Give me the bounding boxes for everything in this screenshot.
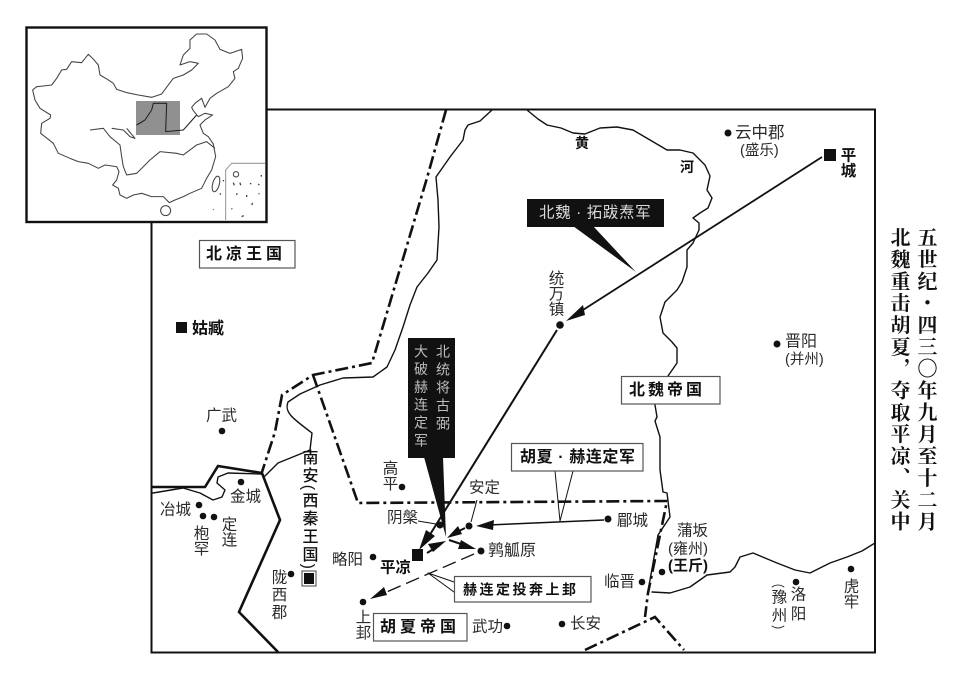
callout: 胡夏·赫连定军: 胡夏 · 赫连定军 bbox=[520, 447, 636, 466]
place: 晋阳 bbox=[774, 332, 824, 368]
place: 冶城 bbox=[160, 500, 202, 518]
place: 平凉 bbox=[380, 549, 423, 576]
title: two vertical columns on the right bbox=[887, 227, 937, 533]
arrow: dashed retreat to 上邽 bbox=[370, 554, 474, 599]
callout: 赫连定投奔上邽 bbox=[428, 573, 591, 602]
place: 阴槃: 阴槃 bbox=[387, 508, 418, 526]
river label: 黄河 bbox=[575, 135, 694, 175]
place: 略阳 bbox=[332, 550, 376, 568]
place: 阴槃 bbox=[387, 508, 444, 528]
place: 武功: 武功 bbox=[472, 618, 503, 636]
place: 上邽: 上邽 bbox=[354, 609, 371, 640]
arrows: converging battle movements near 平凉 bbox=[427, 526, 476, 553]
callout: 北魏·拓跋焘军 bbox=[527, 199, 664, 272]
place: 金城 bbox=[230, 479, 262, 506]
arrow: 郿城 to 安定 bbox=[476, 520, 604, 530]
place: 枹罕: 枹罕 bbox=[192, 525, 209, 556]
place: 虎牢: 虎牢 bbox=[842, 578, 859, 609]
place: 定连: 定连 bbox=[220, 516, 237, 547]
callout: 赫连定投奔上邽: 赫连定投奔上邽 bbox=[463, 582, 578, 598]
river label: 黄河: 河 bbox=[680, 159, 694, 175]
place: 晋阳: (并州) bbox=[785, 351, 824, 368]
place: 洛阳（豫州）: 豫州 bbox=[770, 589, 787, 625]
place: 略阳: 略阳 bbox=[332, 550, 363, 568]
place: 统万镇: 统万镇 bbox=[546, 270, 564, 317]
place: 姑臧: 姑臧 bbox=[192, 318, 224, 338]
place: 广武: 广武 bbox=[206, 406, 237, 424]
place: 枹罕 bbox=[192, 513, 209, 556]
place: 安定 bbox=[466, 478, 500, 530]
place: 临晋: 临晋 bbox=[604, 572, 635, 590]
place: 蒲坂（雍州）（王斤）: (雍州) bbox=[668, 540, 708, 558]
place: 蒲坂（雍州）（王斤） bbox=[659, 522, 708, 575]
place: 陇西郡 bbox=[270, 569, 294, 622]
place: 鹑觚原: 鹑觚原 bbox=[488, 542, 536, 560]
place: 平城: 平城 bbox=[838, 147, 856, 179]
place: 广武 bbox=[206, 406, 237, 434]
place: 金城: 金城 bbox=[230, 488, 262, 506]
place: 冶城: 冶城 bbox=[160, 500, 192, 518]
callout: 胡夏·赫连定军 bbox=[512, 444, 643, 521]
place: 晋阳: 晋阳 bbox=[785, 332, 817, 350]
place: 洛阳（豫州）: 洛阳 bbox=[788, 586, 806, 625]
rivers: Yellow River and Wei River bbox=[153, 110, 875, 593]
place: 姑臧 bbox=[176, 318, 224, 338]
label: 胡夏帝国: 胡夏帝国 bbox=[380, 617, 460, 636]
label: 北魏帝国: 北魏帝国 bbox=[629, 380, 705, 399]
label: 北魏帝国 bbox=[622, 376, 720, 404]
place: 高平 bbox=[380, 460, 405, 491]
place: 高平: 高平 bbox=[380, 460, 398, 491]
label: 北凉王国 bbox=[200, 240, 295, 268]
title: two vertical columns on the right: 五世纪・四三〇年九月至十二月 bbox=[914, 227, 937, 533]
place: 洛阳（豫州） bbox=[770, 579, 806, 628]
callout: 北魏·拓跋焘军: 北魏 · 拓跋焘军 bbox=[539, 204, 651, 222]
place: 平凉: 平凉 bbox=[380, 558, 411, 576]
place: 虎牢 bbox=[842, 566, 859, 609]
arrow: 平城 to 统万镇 bbox=[566, 157, 822, 321]
place: 云中郡: 云中郡 bbox=[735, 123, 784, 142]
title: two vertical columns on the right: 北魏重击胡夏，夺取平凉、关中 bbox=[887, 227, 910, 533]
arrow: 统万镇 to 平凉 bbox=[419, 330, 557, 550]
place: 平城 bbox=[824, 147, 856, 179]
dash-dot boundaries of the Northern Wei and Hu Xia bbox=[262, 110, 684, 650]
label: 北凉王国: 北凉王国 bbox=[206, 245, 286, 263]
place: 郿城: 郿城 bbox=[617, 512, 649, 530]
place: 定连 bbox=[211, 514, 237, 547]
river label: 黄河: 黄 bbox=[575, 135, 589, 151]
panel: main map frame bbox=[152, 110, 875, 652]
place: 安定: 安定 bbox=[469, 478, 500, 496]
place: 蒲坂（雍州）（王斤）: (王斤) bbox=[668, 558, 708, 574]
place: 长安: 长安 bbox=[570, 614, 601, 632]
place: 云中郡: (盛乐) bbox=[740, 142, 779, 159]
place: 陇西郡: 陇西郡 bbox=[270, 569, 287, 622]
place: 郿城 bbox=[604, 512, 649, 530]
place: 长安 bbox=[559, 614, 601, 632]
label: 胡夏帝国 bbox=[374, 614, 467, 641]
thick state borders in the southwest bbox=[151, 466, 280, 652]
inset map of China with highlighted area bbox=[26, 28, 266, 222]
callout: 北统将古弼 大破赫连定军: 北统将古弼 bbox=[435, 344, 451, 434]
callout: 北统将古弼 大破赫连定军 bbox=[408, 338, 455, 537]
place: 南安（西秦王国）: 南安(西秦王国) bbox=[300, 449, 318, 571]
place: 蒲坂（雍州）（王斤）: 蒲坂 bbox=[677, 522, 708, 540]
place: 云中郡 bbox=[724, 123, 784, 159]
callout: 北统将古弼 大破赫连定军: 大破赫连定军 bbox=[413, 344, 429, 451]
